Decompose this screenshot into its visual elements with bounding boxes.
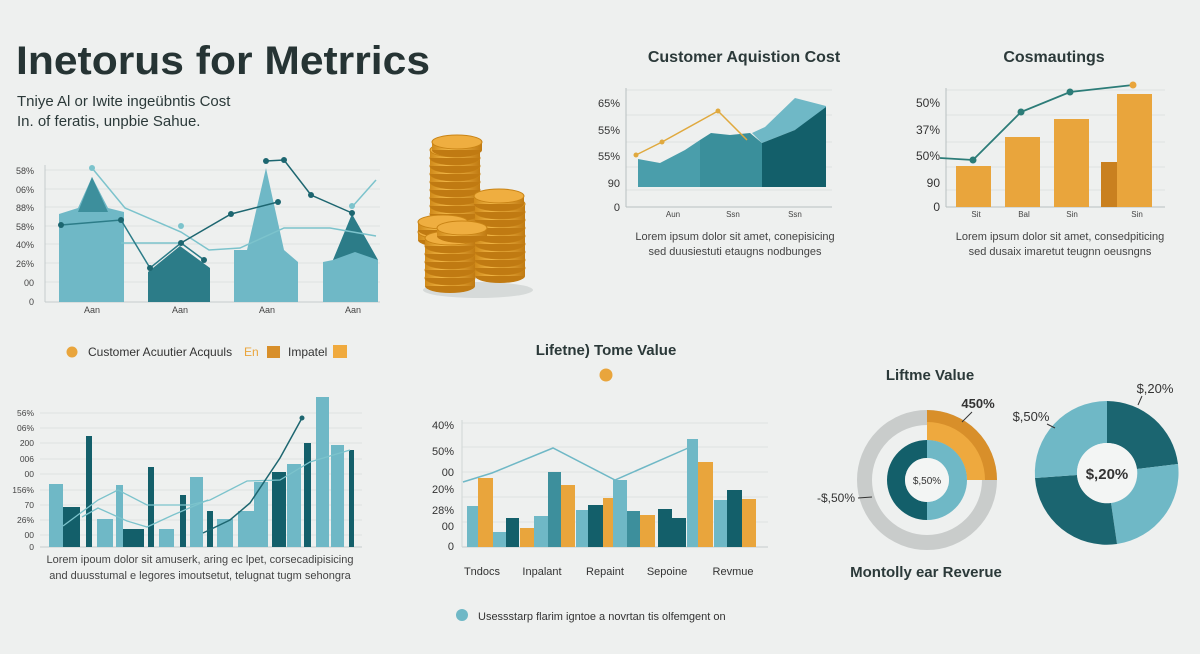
chart: area/line chart top-left: Aan xyxy=(259,305,275,315)
legend: top-left chart: Impatel xyxy=(288,345,327,359)
caption: sed duusiestuti etaugns nodbunges xyxy=(648,246,822,258)
panel: Cosmautings: Sit xyxy=(971,210,981,219)
chart: area/line chart top-left: 88% xyxy=(16,203,34,213)
panel: Customer Acquisition Cost: Aun xyxy=(666,210,680,219)
panel: Lifetime Value bar chart: 50% xyxy=(432,446,454,458)
caption: sed dusaix imaretut teugnn oeusngns xyxy=(969,246,1152,258)
panel: Customer Acquisition Cost: 55% xyxy=(598,151,620,163)
donut: left nested xyxy=(817,396,997,542)
chart: bottom-left bar chart xyxy=(12,397,362,582)
chart: area/line chart top-left: 58% xyxy=(16,222,34,232)
panel: Customer Acquisition Cost: 90 xyxy=(608,178,620,190)
panel: Cosmautings: 50% xyxy=(916,96,940,110)
chart: area/line chart top-left: 40% xyxy=(16,240,34,250)
title: Inetorus for Metrrics xyxy=(16,39,430,83)
heading: Liftme Value xyxy=(886,367,974,384)
chart: area/line chart top-left xyxy=(16,157,380,315)
caption xyxy=(47,554,353,582)
panel: Customer Acquisition Cost: Ssn xyxy=(726,210,740,219)
caption xyxy=(956,231,1164,258)
subtitle: In. of feratis, unpbie Sahue. xyxy=(17,113,200,130)
chart: bottom-left bar chart: 00 xyxy=(25,469,34,479)
heading: Cosmautings xyxy=(1003,49,1105,66)
chart: bottom-left bar chart: 156% xyxy=(12,485,34,495)
chart: area/line chart top-left: Aan xyxy=(345,305,361,315)
chart: area/line chart top-left: 00 xyxy=(24,278,34,288)
chart: bottom-left bar chart: 0 xyxy=(29,542,34,552)
donut: left nested: 450% xyxy=(961,396,995,411)
chart: bottom-left bar chart: 70 xyxy=(25,500,34,510)
caption: Lorem ipsum dolor sit amet, conepisicing xyxy=(635,231,835,243)
donut: right: $,50% xyxy=(1013,409,1050,424)
chart: bottom-left bar chart: 006 xyxy=(20,454,34,464)
panel: Lifetime Value bar chart: 0 xyxy=(448,541,454,553)
panel: Cosmautings: Bal xyxy=(1018,210,1030,219)
panel: Lifetime Value bar chart: Sepoine xyxy=(647,566,687,578)
subtitle xyxy=(17,93,231,130)
legend: bottom: Usessstarp flarim igntoe a novrtan tis olfemgent on xyxy=(478,611,726,623)
panel: Cosmautings: 37% xyxy=(916,123,940,137)
panel: Cosmautings: Sin xyxy=(1131,210,1143,219)
panel: Lifetime Value bar chart xyxy=(432,342,768,578)
panel: Cosmautings: Sin xyxy=(1066,210,1078,219)
donut: left nested: -$,50% xyxy=(817,491,855,505)
caption: Lorem ipoum dolor sit amuserk, aring ec lpet, corsecadipisicing xyxy=(47,554,353,566)
legend: top-left chart: En xyxy=(244,345,259,359)
panel: Cosmautings xyxy=(916,49,1165,258)
panel: Cosmautings: 0 xyxy=(933,200,940,214)
icon: orange dot xyxy=(600,368,612,382)
chart: bottom-left bar chart: 06% xyxy=(17,423,34,433)
chart: area/line chart top-left: 0 xyxy=(29,297,34,307)
caption: Montolly ear Reverue xyxy=(850,564,1002,581)
legend: top-left chart xyxy=(66,345,347,359)
panel: Lifetime Value bar chart: 28% xyxy=(432,505,454,517)
donut: right: $,20% xyxy=(1137,381,1174,396)
panel: Cosmautings: 90 xyxy=(927,176,940,190)
caption xyxy=(635,231,835,258)
chart: bottom-left bar chart: 200 xyxy=(20,438,34,448)
chart: bottom-left bar chart: 00 xyxy=(25,530,34,540)
panel: Lifetime Value bar chart: Inpalant xyxy=(522,566,562,578)
panel: Customer Acquisition Cost: 55% xyxy=(598,125,620,137)
chart: area/line chart top-left: Aan xyxy=(172,305,188,315)
icon: coin stacks xyxy=(418,135,533,298)
panel: Lifetime Value donuts xyxy=(817,367,1179,581)
chart: area/line chart top-left: 06% xyxy=(16,185,34,195)
chart: bottom-left bar chart: 26% xyxy=(17,515,34,525)
subtitle: Tniye Al or Iwite ingeübntis Cost xyxy=(17,93,231,110)
caption: and duusstumal e legores imoutsetut, telugnat tugm sehongra xyxy=(49,570,352,582)
donut: right xyxy=(1013,381,1179,545)
chart: area/line chart top-left: 58% xyxy=(16,166,34,176)
caption: Lorem ipsum dolor sit amet, consedpiticing xyxy=(956,231,1164,243)
panel: Customer Acquisition Cost xyxy=(598,49,841,258)
donut: left nested: $,50% xyxy=(913,476,941,487)
chart: area/line chart top-left: Aan xyxy=(84,305,100,315)
panel: Customer Acquisition Cost: 65% xyxy=(598,98,620,110)
panel: Lifetime Value bar chart: Repaint xyxy=(586,566,624,578)
heading: Customer Aquistion Cost xyxy=(648,49,841,66)
donut: right: $,20% xyxy=(1086,466,1128,483)
panel: Lifetime Value bar chart: 00 xyxy=(442,467,454,479)
panel: Lifetime Value bar chart: Tndocs xyxy=(464,566,501,578)
panel: Lifetime Value bar chart: 40% xyxy=(432,420,454,432)
chart: bottom-left bar chart: 56% xyxy=(17,408,34,418)
legend: top-left chart: Customer Acuutier Acquuls xyxy=(88,345,232,359)
panel: Cosmautings: 50% xyxy=(916,149,940,163)
panel: Customer Acquisition Cost: Ssn xyxy=(788,210,802,219)
panel: Lifetime Value bar chart: 20% xyxy=(432,484,454,496)
panel: Customer Acquisition Cost: 0 xyxy=(614,202,620,214)
heading: Lifetne) Tome Value xyxy=(536,342,676,359)
chart: area/line chart top-left: 26% xyxy=(16,259,34,269)
panel: Lifetime Value bar chart: 00 xyxy=(442,521,454,533)
panel: Lifetime Value bar chart: Revmue xyxy=(713,566,753,578)
